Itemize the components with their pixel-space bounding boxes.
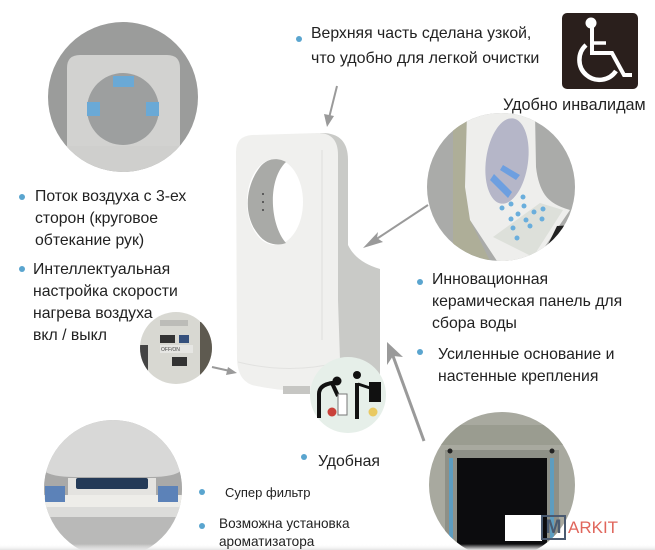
detail circle: reinforced wall mount [429,412,575,550]
text: base and mounts: настенные крепления [438,368,598,385]
arrow: to ceramic panel [363,205,428,248]
text: speed setting [33,261,178,344]
bullet: speed setting [19,266,25,272]
text: speed setting: вкл / выкл [33,327,107,344]
logo: MARKIT [541,515,618,540]
text: super filter: Супер фильтр [225,485,310,500]
text: airflow: сторон (круговое [35,210,158,227]
text: narrow top [311,25,539,67]
bullet: super filter [199,489,205,495]
text: accessible label: Удобно инвалидам [503,96,646,114]
text: base and mounts [438,346,614,385]
logo background [505,515,542,541]
text: base and mounts: Усиленные основание и [438,346,614,363]
text: speed setting: настройка скорости [33,283,178,300]
bullet: fragrance [199,523,205,529]
text: narrow top: что удобно для легкой очистки [311,50,539,67]
text: ceramic panel [432,271,622,332]
text: airflow: Поток воздуха с 3-ех [35,188,186,205]
logo: MARKIT: ARKIT [568,518,618,537]
arrow: to wall mount [387,342,424,441]
bullet: base and mounts [417,349,423,355]
text: narrow top: Верхняя часть сделана узкой, [311,25,531,42]
text: fragrance [219,516,350,549]
detail circle: control panel [140,312,212,384]
text: ceramic panel: Инновационная [432,271,548,288]
icon: wheelchair [562,13,638,89]
text: speed setting: Интеллектуальная [33,261,170,278]
text: speed setting: нагрева воздуха [33,305,153,322]
detail circle: ceramic panel [427,113,575,261]
bottom strip [0,544,655,550]
text: airflow [35,188,186,249]
hand dryer [236,133,380,394]
detail circle: filter drawer [43,420,182,550]
detail circle: convenient use pictogram [310,357,386,433]
bullet: airflow [19,194,25,200]
bullet: convenient [301,454,307,460]
text: airflow: обтекание рук) [35,232,144,249]
arrow: to narrow top [324,86,337,127]
text: ceramic panel: керамическая панель для [432,293,622,310]
bullet: narrow top [296,36,302,42]
text: convenient: Удобная [318,453,380,470]
detail circle: air outlets [48,22,198,173]
text: ceramic panel: сбора воды [432,315,517,332]
logo: MARKIT: M [546,517,561,538]
bullet: ceramic panel [417,279,423,285]
detail circle: control panel: OFF/ON [161,347,180,353]
arrow: to control panel [212,367,237,375]
text: fragrance: ароматизатора [219,534,314,549]
text: fragrance: Возможна установка [219,516,350,531]
